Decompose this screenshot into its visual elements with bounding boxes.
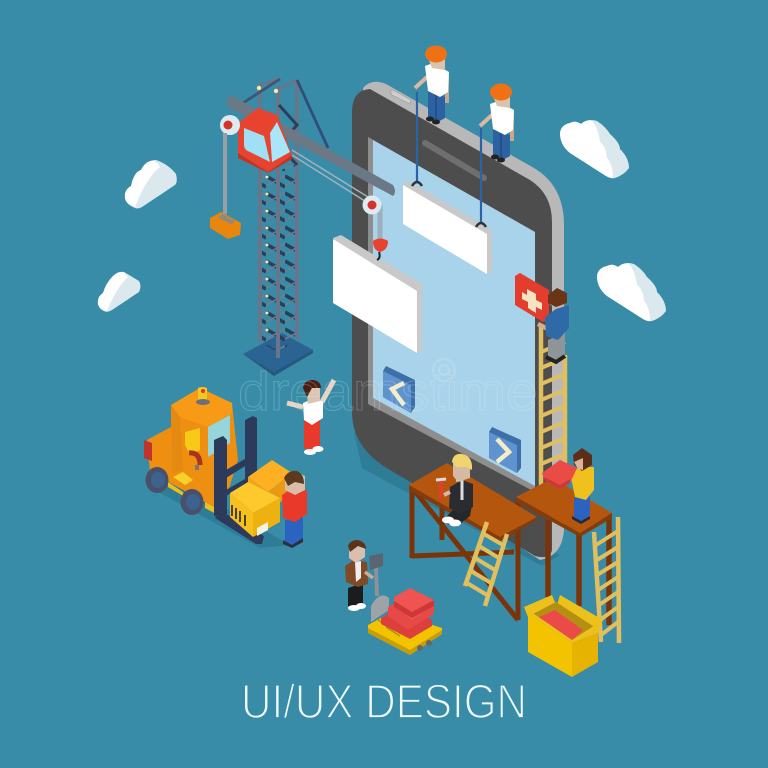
seat [185,428,200,455]
button: right chevron [489,427,521,473]
wheels [146,467,168,493]
screen bezel [368,137,535,492]
rope left [416,92,418,183]
smartphone [352,82,564,560]
phone front [352,89,552,557]
stacked cushions [381,604,432,639]
crane [210,78,395,376]
foot plate [173,472,193,485]
forklift body [147,388,238,510]
crane tower [243,78,328,358]
cab window [208,415,230,457]
cloud: lower left [98,272,140,312]
watermark: dreamstime [238,362,538,422]
icon: red cross button [515,273,549,322]
steering [189,453,200,465]
title: UI/UX DESIGN [241,676,527,729]
crane jib [227,95,395,196]
rope hooks [412,182,486,227]
cloud: upper left [125,160,177,208]
box interior [531,602,596,643]
crane cables [292,150,368,203]
worker: blond sitting with hammer [436,454,473,527]
phone side edge [363,82,564,560]
worker: waving with red trousers [287,380,334,455]
scaffold: left table [409,463,537,620]
button: left chevron [383,366,415,413]
worker: red shirt [282,471,307,548]
cloud: lower right [597,263,666,321]
worker: brown jacket [345,540,373,611]
ladder: small on scaffold [465,522,507,606]
worker: top right with helmet [480,84,514,162]
forklift door frame [171,405,183,474]
beacon [198,387,207,401]
left table frame [412,488,518,620]
phone shadow [354,432,560,566]
forklift roof [171,388,232,427]
ladder: right side [594,517,619,643]
left table top [409,463,537,537]
white panel: top hanging [403,181,492,274]
forklift [144,387,292,544]
box faces [528,613,572,677]
mast [214,416,264,544]
ladder: phone side [541,327,565,497]
worker: yellow shirt with cushion [542,448,594,524]
right pulley and hook [378,205,382,240]
pallet base [368,612,442,655]
worker: on ladder [538,288,569,362]
counterweight [223,133,227,214]
screen [373,140,535,486]
worker: top left with helmet [415,46,449,124]
box back flaps [524,595,557,622]
pallet handle [376,568,377,596]
cloud: upper right [560,120,629,178]
crane base [243,333,313,376]
white panel: crane hanging [333,235,422,353]
pallet truck [368,553,442,655]
right table legs [548,513,609,625]
scaffold: right table [516,478,612,625]
left pulley [220,115,240,135]
lower box [230,482,280,513]
open box [524,595,603,677]
speaker [425,143,484,178]
box contents [537,610,583,642]
home top button [390,90,411,104]
upper box [248,460,292,492]
crane cab [238,108,292,172]
rope right [480,128,482,223]
right table top [516,478,612,533]
forklift shadow [146,478,290,548]
